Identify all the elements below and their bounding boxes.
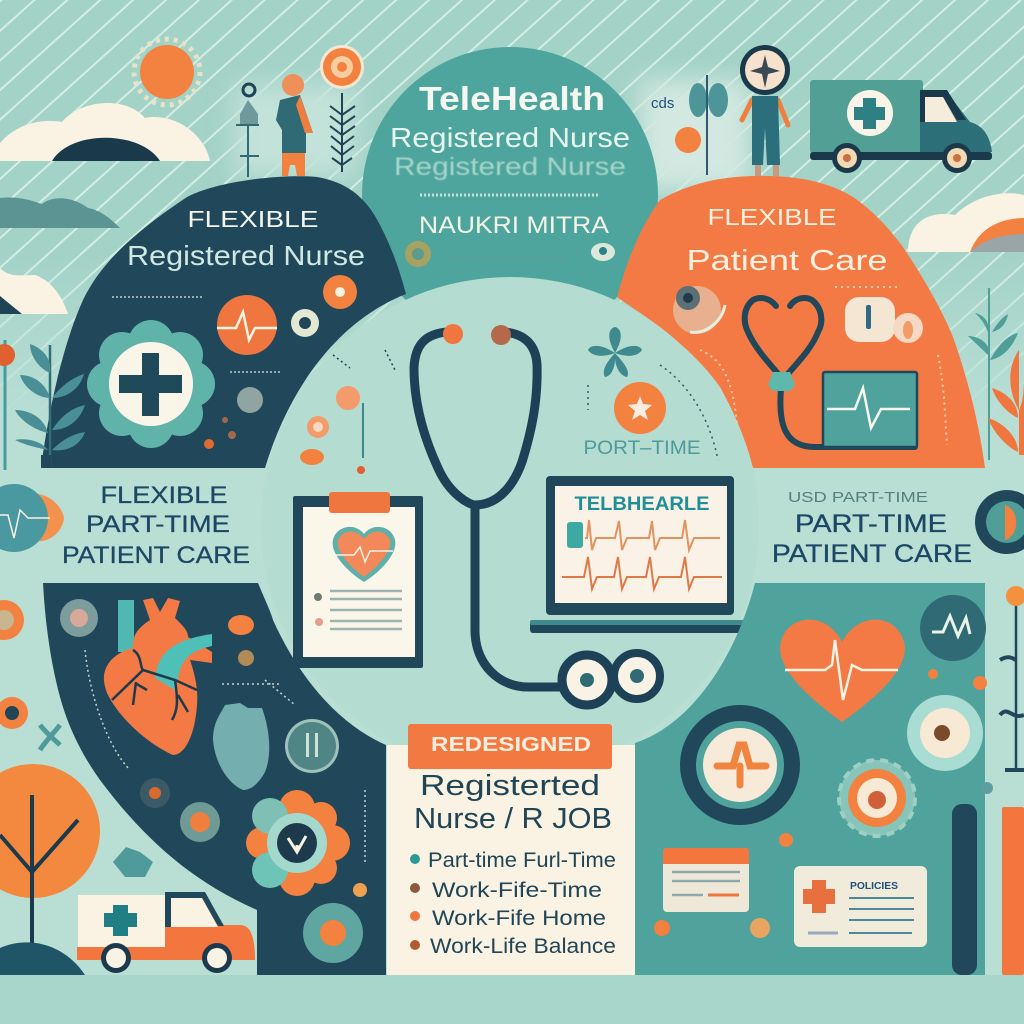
figure: nurse top right	[740, 45, 790, 176]
icon: cloud right	[908, 193, 1024, 252]
icon: leaf shape	[113, 847, 153, 877]
heading: Registered Nurse: Registered Nurse	[127, 240, 365, 271]
icon: orange gear badge	[839, 760, 915, 836]
icon: grey badge	[285, 719, 339, 773]
list: bullets: Work-Fife Home	[432, 907, 606, 930]
icon: cloud small left	[0, 268, 68, 314]
icon: orange star badge	[614, 382, 666, 434]
heading: Patient Care: Patient Care	[686, 245, 888, 277]
icon: orange flower	[246, 790, 350, 896]
icon: cluster near ambulance: cds	[651, 95, 674, 112]
text block: left Flexible Part-Time Patient Care	[62, 482, 250, 569]
icon: leaves left plant	[15, 344, 85, 468]
icon: target flower	[320, 45, 364, 172]
text block: right Part-Time Patient Care: USD PART-TIME	[788, 489, 928, 506]
icon: stethoscope	[414, 324, 660, 705]
icon: white pills	[845, 297, 923, 343]
icon: ambulance bottom left	[77, 892, 255, 973]
heading: Flexible: FLEXIBLE	[708, 204, 836, 230]
heading: Flexible: FLEXIBLE	[188, 206, 318, 232]
icons in circle	[405, 241, 615, 267]
bars: dark and orange pillars	[952, 804, 1024, 975]
text block: right Part-Time Patient Care	[772, 489, 972, 568]
text block: right Part-Time Patient Care: PART-TIME	[795, 510, 947, 538]
icon: sun	[134, 39, 200, 105]
heading: Registered Nurse job: Nurse / R JOB	[414, 803, 612, 835]
icon: info card: POLICIES	[850, 881, 898, 892]
icon: ring badge	[680, 705, 800, 825]
icon: right edge ring badge	[975, 490, 1024, 554]
dotted decorations	[588, 365, 718, 460]
icon: cluster near ambulance	[651, 75, 728, 175]
icon: monitor	[823, 372, 917, 447]
text block: left Flexible Part-Time Patient Care: PATIENT CARE	[62, 542, 250, 569]
panel: teal bottom-right	[635, 583, 1024, 975]
figure: person left	[276, 74, 313, 176]
icon: eye-like circle	[673, 286, 725, 334]
heading: Registered Nurse job	[414, 770, 612, 835]
list: bullets	[410, 849, 616, 958]
banner: Redesigned	[408, 724, 612, 769]
icon: teal flower bottom	[303, 903, 363, 963]
dotted decorations	[700, 287, 947, 445]
icon: dark circle with pulse	[920, 595, 986, 661]
text block: left Flexible Part-Time Patient Care: FLEXIBLE	[100, 482, 228, 509]
icon: stethoscope chest piece	[768, 372, 795, 391]
icon: ambulance top right	[810, 80, 992, 173]
panel: dark bottom-left	[43, 583, 386, 975]
text: TeleHealth on screen: TELBHEARLE	[574, 494, 710, 515]
text: Naukri Mitra: NAUKRI MITRA	[419, 212, 609, 239]
banner: Redesigned: REDESIGNED	[431, 734, 591, 756]
icon: heart with pulse	[780, 620, 905, 722]
icon: laptop telehealth screen	[530, 476, 745, 633]
icon: tree bottom left	[0, 764, 100, 975]
panel: cream card	[387, 724, 635, 975]
icon: right edge plant	[981, 586, 1024, 794]
icon: heartbeat circle	[217, 295, 277, 355]
heading: Registered Nurse: Registered Nurse	[390, 122, 630, 153]
icon: stethoscope heart	[745, 298, 915, 447]
icon: clipboard	[293, 492, 423, 668]
icon: teal heart	[213, 703, 269, 790]
chart: ECG traces	[562, 520, 722, 589]
panel: orange top-right dome	[617, 176, 985, 468]
list: bullets: Work-Life Balance	[430, 935, 616, 958]
icon: small dots	[60, 599, 367, 897]
icon: calendar card	[663, 848, 749, 912]
panel: dark top-left dome	[41, 176, 406, 468]
icon: leaves right edge	[968, 288, 1024, 460]
icon: cream gear badge	[907, 695, 983, 771]
small dots	[654, 669, 987, 938]
icon: hills left	[0, 197, 120, 228]
panel: central circle	[261, 277, 759, 773]
icon: small signpost	[236, 84, 259, 177]
icon: info card	[794, 866, 927, 947]
icon: small dots	[112, 275, 357, 449]
icon: anatomical heart	[104, 598, 212, 755]
text block: left Flexible Part-Time Patient Care: PART-TIME	[86, 511, 230, 538]
icon: cloud left	[0, 103, 210, 161]
dotted fine print	[420, 194, 600, 196]
icon: teal flower	[588, 327, 642, 377]
heading: TeleHealth: TeleHealth	[419, 80, 605, 117]
icon: left edge badges	[0, 340, 64, 750]
icon: plants in centre left	[300, 350, 395, 474]
list: bullets: Part-time Furl-Time	[428, 849, 616, 872]
icon: medical cross badge	[87, 320, 215, 448]
panel: top centre circle	[362, 47, 658, 343]
heading: Registered Nurse job: Registerted	[420, 770, 600, 802]
list: bullets: Work-Fife-Time	[432, 879, 602, 902]
text block: right Part-Time Patient Care: PATIENT CARE	[772, 540, 972, 568]
text: Part-Time: PORT–TIME	[584, 438, 700, 459]
blurred repeated heading: Registered Nurse	[394, 153, 626, 181]
